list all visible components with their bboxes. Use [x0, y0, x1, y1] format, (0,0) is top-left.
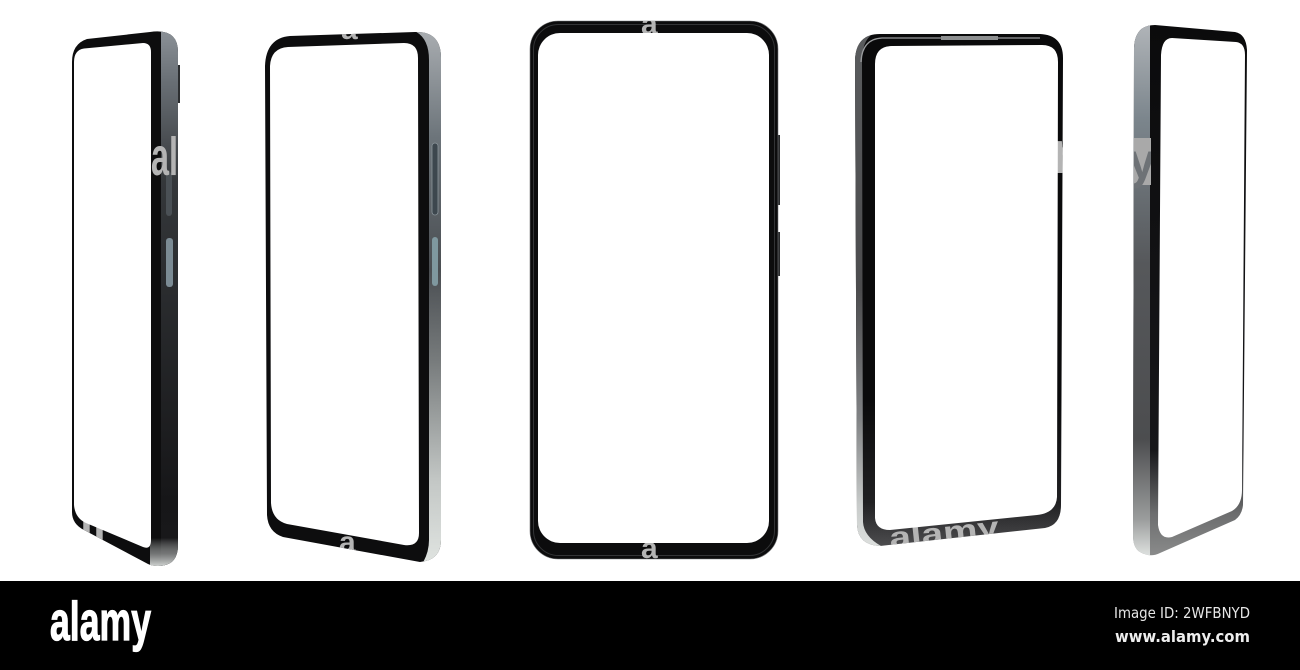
screen: [538, 33, 769, 543]
phone body: [1133, 25, 1247, 555]
phone 4: slight right view: [855, 34, 1063, 546]
power button: [166, 238, 173, 287]
watermark fragments: al: [151, 127, 178, 187]
image id: Image ID: 2WFBNYD: [1114, 604, 1250, 622]
watermark fragments: [80, 127, 178, 552]
side buttons: [777, 135, 780, 276]
phone body: [265, 32, 441, 562]
phone body: [72, 31, 178, 566]
screen: [1158, 38, 1245, 538]
phone body: [530, 21, 778, 559]
metal side band: [855, 35, 881, 546]
camera bump: [177, 65, 180, 103]
phone 1: angled left view: [72, 25, 182, 570]
watermark fragments: a: [641, 8, 658, 41]
volume button: [166, 172, 172, 216]
screen: [74, 43, 151, 548]
alamy logo: alamy: [50, 590, 151, 652]
speaker grille: [941, 36, 998, 40]
volume button: [432, 143, 438, 215]
watermark fragment: y: [1128, 133, 1156, 189]
phone 2: slight left view: [265, 13, 446, 570]
metal side band: [150, 32, 178, 566]
watermark fragments: [339, 13, 358, 559]
metal side band: [416, 32, 441, 562]
watermark fragments: a: [339, 526, 356, 559]
power button: [432, 237, 438, 286]
phone body: [855, 34, 1063, 546]
watermark fragments: a: [641, 532, 658, 565]
phone 5: angled right view: [1128, 20, 1247, 560]
watermark fragments: m: [1050, 119, 1103, 186]
watermark fragments: a: [341, 13, 358, 46]
footer bar: [0, 581, 1300, 670]
screen: [875, 45, 1058, 530]
watermark fragments: ll: [80, 516, 106, 552]
bezel ring: [534, 24, 774, 556]
metal side band: [1133, 26, 1150, 555]
watermark fragments: alamy: [888, 512, 1000, 555]
watermark fragment: [1134, 138, 1151, 185]
watermark fragments: [641, 8, 658, 565]
phone 3: front view: [530, 8, 780, 565]
screen: [270, 43, 419, 545]
watermark fragments: [888, 119, 1103, 555]
website: www.alamy.com: [1115, 627, 1250, 646]
top rim highlight: [861, 38, 1040, 62]
